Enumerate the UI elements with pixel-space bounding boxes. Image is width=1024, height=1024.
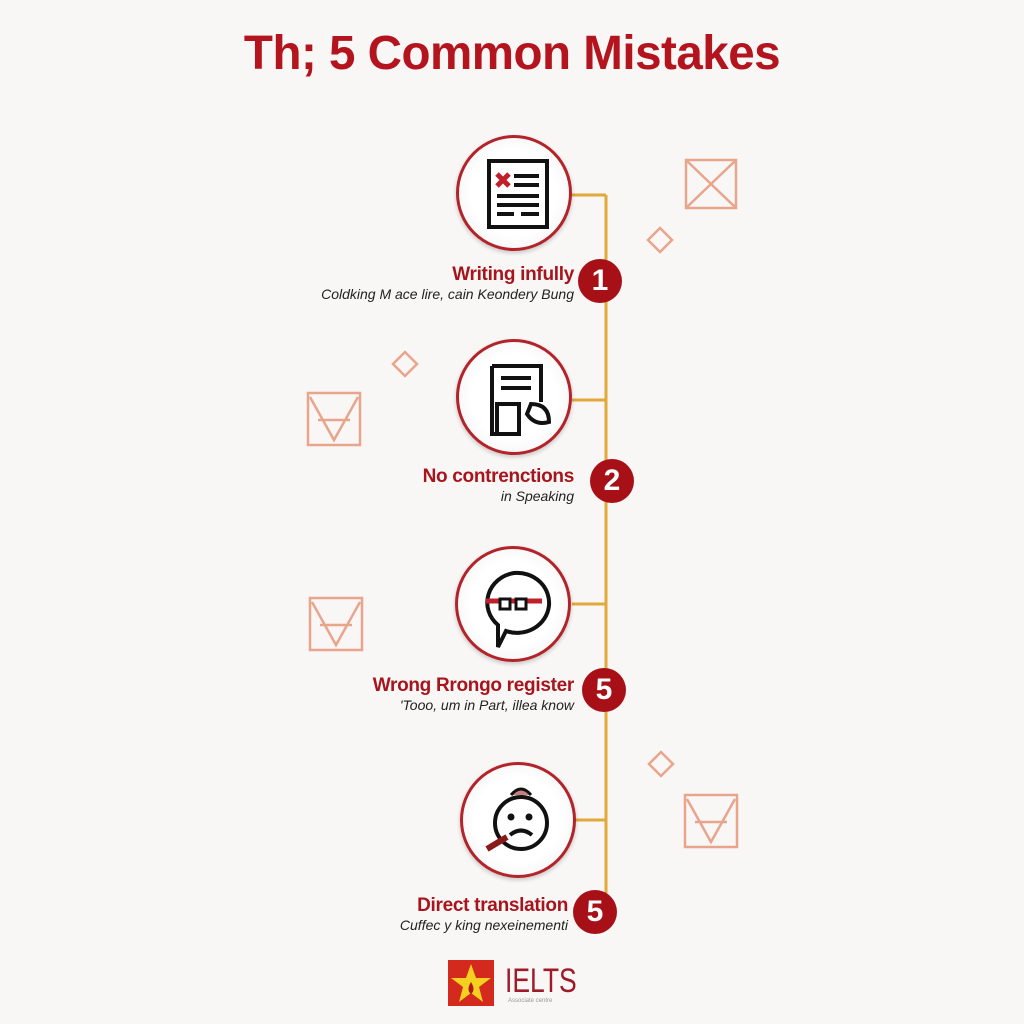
badge 2: [590, 459, 634, 503]
step 4 label: Direct translation: [417, 895, 568, 916]
icon circle 3: speech bubble: [455, 546, 571, 662]
step 1 label: Writing infully: [452, 264, 574, 285]
step 1 label: Coldking M ace lire, cain Keondery Bung: [321, 286, 574, 302]
step 4 label: Cuffec y king nexeinementi: [400, 917, 568, 933]
badge 1: 1: [592, 264, 608, 297]
badge 3: [582, 668, 626, 712]
logo: Associate centre: [508, 998, 552, 1004]
badge 3: 5: [596, 673, 612, 706]
logo: IELTS: [505, 962, 577, 1000]
icon circle 1: document with x: [456, 135, 572, 251]
step 2 label: No contrenctions: [423, 466, 574, 487]
step 3 label: [372, 675, 575, 713]
step 2 label: in Speaking: [501, 488, 574, 504]
badge 4: [573, 890, 617, 934]
logo: [448, 960, 577, 1006]
icon circle 4: sad face: [460, 762, 576, 878]
step 3 label: 'Tooo, um in Part, illea know: [400, 697, 574, 713]
step 4 label: [400, 895, 568, 933]
step 3 label: Wrong Rrongo register: [373, 675, 574, 696]
badge 2: 2: [604, 464, 620, 497]
step 1 label: [321, 264, 574, 302]
title: Th; 5 Common Mistakes: [244, 27, 780, 80]
icon circle 2: document with leaf: [456, 339, 572, 455]
badge 4: 5: [587, 895, 603, 928]
step 2 label: [423, 466, 574, 504]
badge 1: [578, 259, 622, 303]
